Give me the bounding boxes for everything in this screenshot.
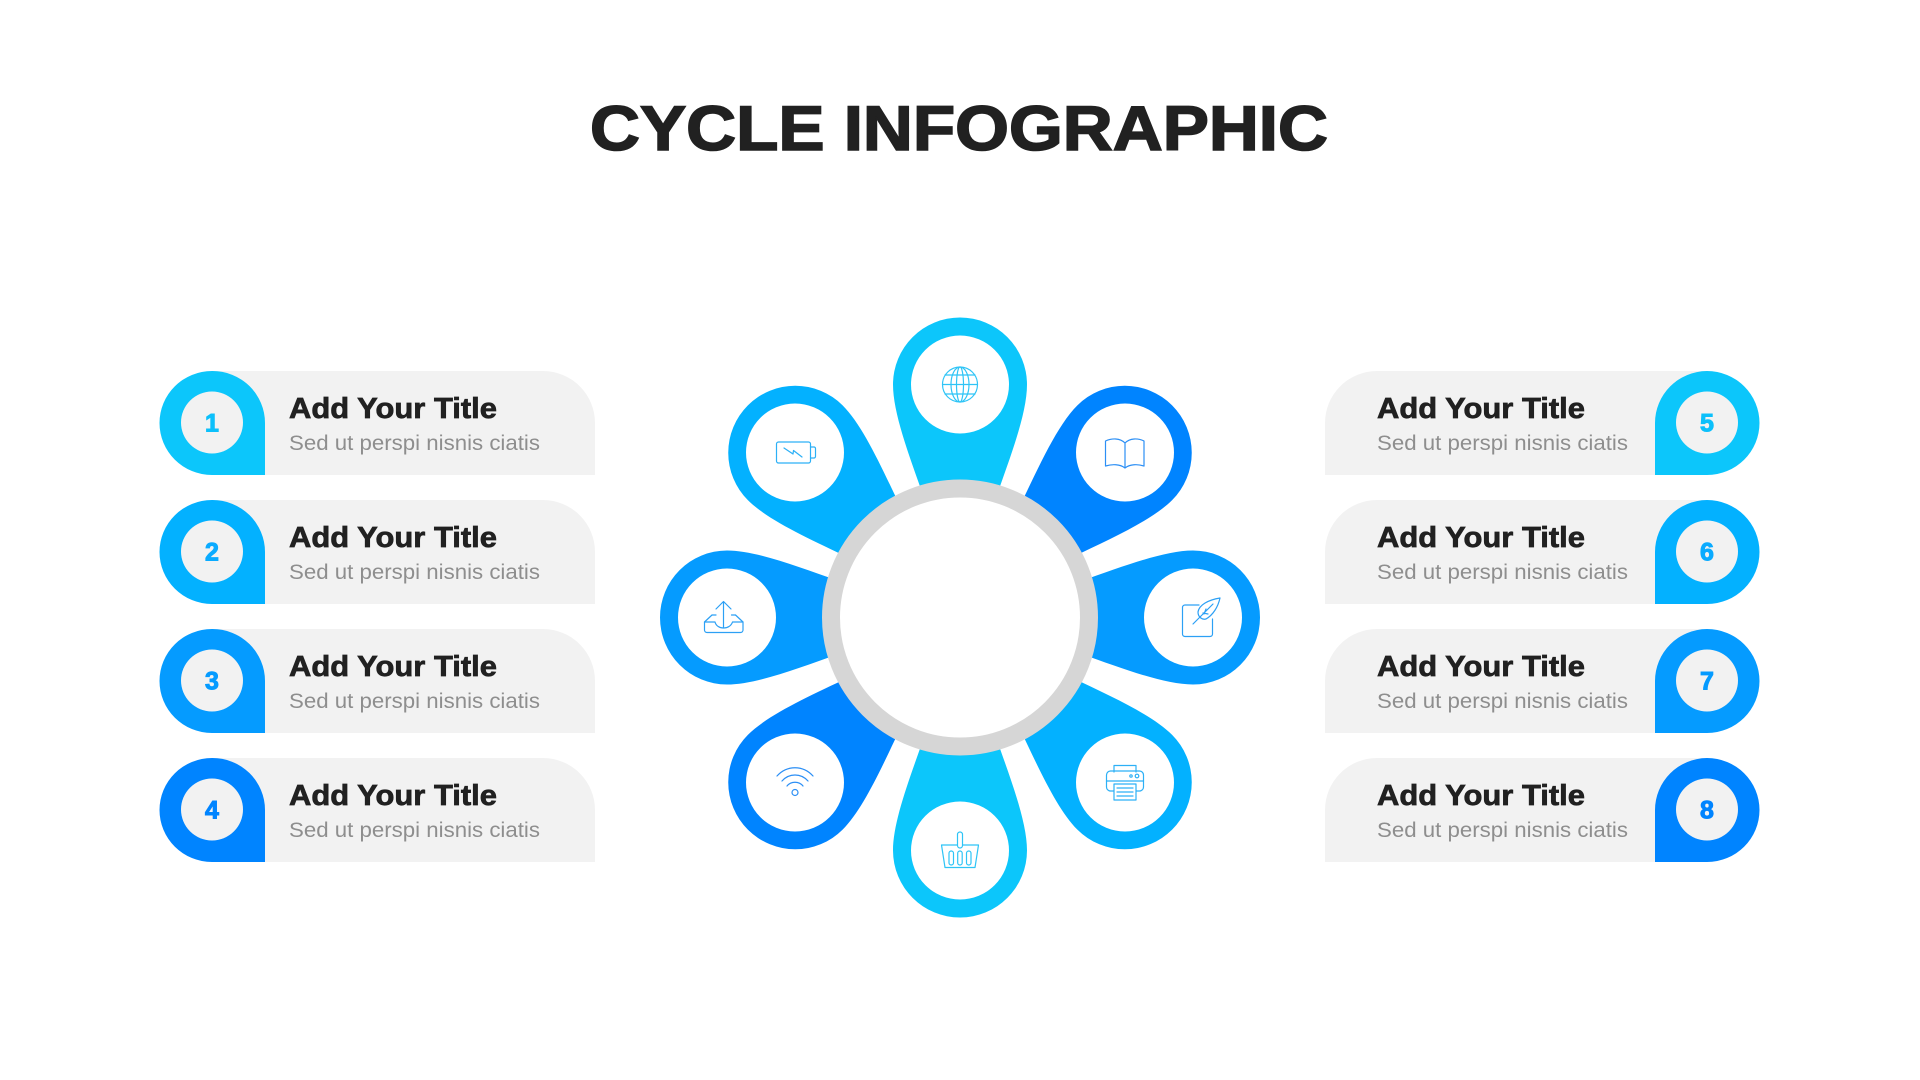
item 8: 8 xyxy=(1700,796,1714,824)
petal: bottom, basket xyxy=(893,738,1027,918)
item 8 xyxy=(1325,758,1760,862)
item 4: 4 xyxy=(205,796,219,824)
item 6 xyxy=(1325,500,1760,604)
item 4 xyxy=(160,758,595,862)
item 3 xyxy=(160,629,595,733)
item 2: 2 xyxy=(205,538,219,566)
item 6: Sed ut perspi nisnis ciatis xyxy=(1377,561,1628,584)
petal: top right, book xyxy=(997,358,1220,580)
item 3: 3 xyxy=(205,668,219,696)
petal: top, globe xyxy=(893,318,1027,498)
item 3: Sed ut perspi nisnis ciatis xyxy=(289,690,540,713)
petal: bottom right, printer xyxy=(997,655,1220,877)
center ring xyxy=(831,488,1089,746)
petal: right, quill xyxy=(1080,550,1260,684)
item 7: Sed ut perspi nisnis ciatis xyxy=(1377,690,1628,713)
item 6: Add Your Title xyxy=(1377,522,1585,554)
icon: open book xyxy=(1106,439,1144,468)
icon: inbox upload xyxy=(704,602,743,632)
item 2 xyxy=(160,500,595,604)
item 6: 6 xyxy=(1700,538,1714,566)
item 1: Add Your Title xyxy=(289,393,497,425)
panel: left list xyxy=(160,371,595,862)
item 5: Add Your Title xyxy=(1377,393,1585,425)
item 3: Add Your Title xyxy=(289,651,497,683)
petal: top left, battery xyxy=(700,358,923,580)
item 1: Sed ut perspi nisnis ciatis xyxy=(289,432,540,455)
icon: basket xyxy=(942,832,978,868)
item 8: Add Your Title xyxy=(1377,780,1585,812)
icon: note with quill xyxy=(1182,598,1220,636)
petal: bottom left, wifi xyxy=(700,655,923,877)
panel: right list xyxy=(1325,371,1760,862)
item 4: Sed ut perspi nisnis ciatis xyxy=(289,819,540,842)
item 8: Sed ut perspi nisnis ciatis xyxy=(1377,819,1628,842)
icon: globe xyxy=(942,367,978,402)
item 7 xyxy=(1325,629,1760,733)
item 5: Sed ut perspi nisnis ciatis xyxy=(1377,432,1628,455)
icon: printer xyxy=(1106,766,1144,800)
item 1 xyxy=(160,371,595,475)
icon: wifi xyxy=(777,768,813,796)
petal: left, inbox upload xyxy=(660,550,840,684)
item 4: Add Your Title xyxy=(289,780,497,812)
item 7: Add Your Title xyxy=(1377,651,1585,683)
item 5: 5 xyxy=(1700,410,1714,438)
item 2: Sed ut perspi nisnis ciatis xyxy=(289,561,540,584)
item 1: 1 xyxy=(205,410,219,438)
item 7: 7 xyxy=(1700,668,1714,696)
title: CYCLE INFOGRAPHIC xyxy=(590,94,1328,164)
item 2: Add Your Title xyxy=(289,522,497,554)
icon: battery xyxy=(776,442,816,463)
item 5 xyxy=(1325,371,1760,475)
cycle diagram xyxy=(660,318,1260,918)
